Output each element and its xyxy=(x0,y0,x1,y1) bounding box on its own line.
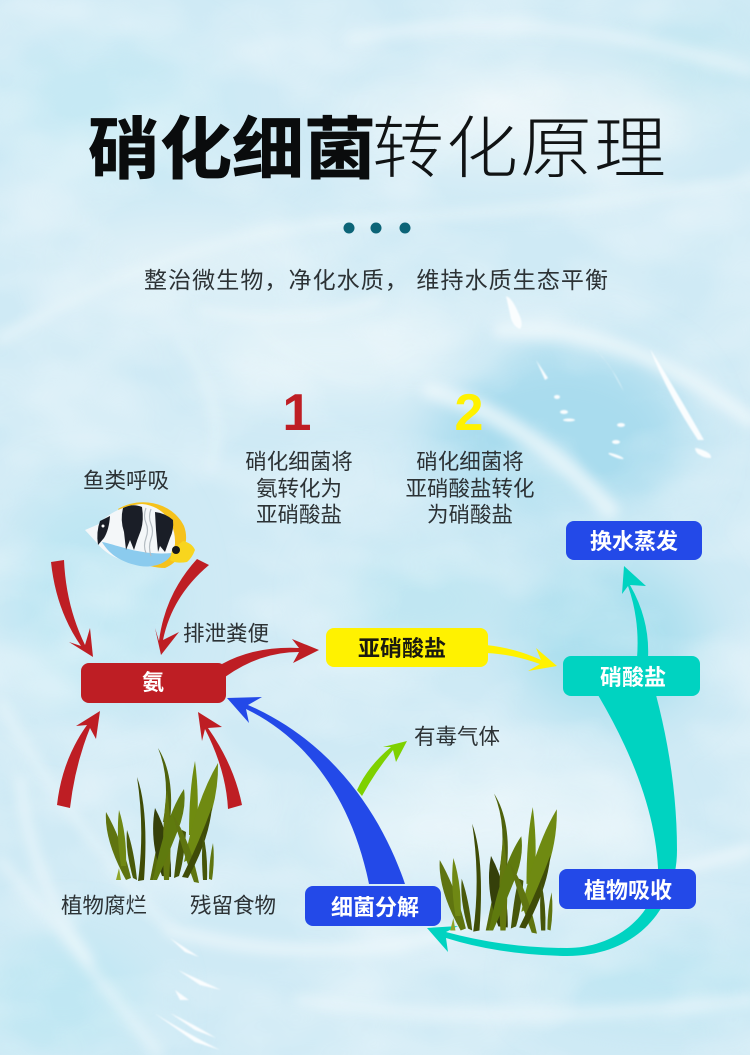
title: 转化原理 xyxy=(372,111,666,187)
arrow: red from decaying plants to ammonia xyxy=(57,711,100,808)
arrow: yellow nitrite to nitrate xyxy=(486,645,557,671)
icon: aquatic grass right xyxy=(440,794,557,934)
step 1 description: 硝化细菌将 xyxy=(245,450,353,474)
icon: butterflyfish xyxy=(85,502,195,568)
box: bacterial decomposition xyxy=(305,886,441,926)
box: water change evaporation xyxy=(566,521,702,560)
arrow: red into ammonia from top left xyxy=(51,560,93,657)
box: bacterial decomposition: 细菌分解 xyxy=(331,895,419,920)
step 1 number: 1 xyxy=(283,384,311,442)
step 2 description: 为硝酸盐 xyxy=(427,503,513,527)
arrow: teal nitrate to water change evaporation xyxy=(622,566,648,658)
title: 硝化细菌 xyxy=(88,112,376,188)
arrow: teal nitrate through plant absorption to bacteria xyxy=(427,695,677,956)
box: nitrate: 硝酸盐 xyxy=(600,665,666,690)
label: decaying plants: 植物腐烂 xyxy=(61,894,147,918)
step 1 description: 氨转化为 xyxy=(256,477,342,501)
box: nitrite xyxy=(326,628,488,667)
step 2 description: 硝化细菌将 xyxy=(416,450,524,474)
step 2 description xyxy=(405,450,535,527)
label: excretion: 排泄粪便 xyxy=(183,622,269,646)
arrow: green toxic gas xyxy=(357,741,407,796)
box: nitrate xyxy=(563,656,700,696)
box: water change evaporation: 换水蒸发 xyxy=(590,529,678,554)
box: ammonia: 氨 xyxy=(142,670,164,695)
arrow: blue bacterial decomposition to ammonia xyxy=(227,697,405,884)
label: toxic gas: 有毒气体 xyxy=(414,725,500,749)
step 2 number: 2 xyxy=(455,384,483,442)
arrow: red from fish to ammonia xyxy=(155,559,209,655)
title xyxy=(88,111,666,188)
step 1 description: 亚硝酸盐 xyxy=(256,503,342,527)
arrow: red from leftover food to ammonia xyxy=(198,712,242,809)
box: ammonia xyxy=(81,663,226,703)
icon: aquatic grass left xyxy=(106,748,218,883)
step 2 description: 亚硝酸盐转化 xyxy=(405,477,535,501)
decorative dots xyxy=(344,222,410,234)
box: plant absorption xyxy=(559,869,696,909)
box: nitrite: 亚硝酸盐 xyxy=(358,636,446,661)
subtitle: 整治微生物，净化水质， 维持水质生态平衡 xyxy=(144,267,608,293)
label: fish respiration: 鱼类呼吸 xyxy=(83,469,169,493)
arrow: red from ammonia to nitrite xyxy=(222,639,319,677)
step 1 description xyxy=(245,450,353,527)
box: plant absorption: 植物吸收 xyxy=(584,878,672,903)
label: leftover food: 残留食物 xyxy=(190,894,276,918)
